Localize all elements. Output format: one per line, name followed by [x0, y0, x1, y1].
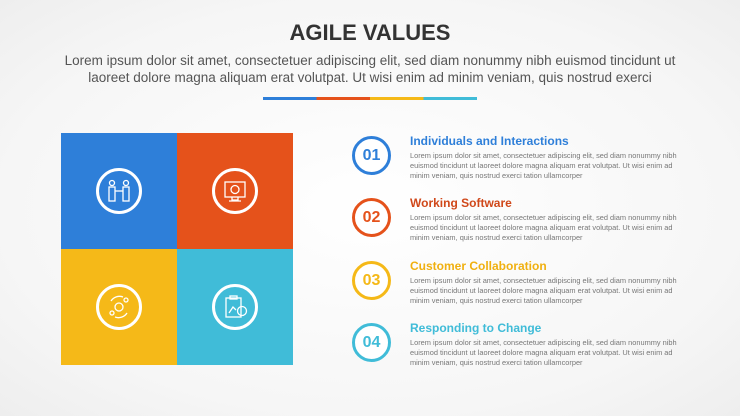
title: AGILE VALUES [290, 20, 450, 45]
heading 04: Responding to Change [410, 321, 541, 335]
number 01: 01 [363, 147, 380, 164]
number 02: 02 [363, 209, 380, 226]
number 02 [352, 198, 391, 237]
item 04 [352, 321, 677, 367]
number 04 [352, 323, 391, 362]
number 03: 03 [363, 272, 380, 289]
number 03 [352, 261, 391, 300]
number 01 [352, 136, 391, 175]
quadrant: orange monitor [177, 133, 293, 249]
quadrant: blue people [61, 133, 177, 249]
heading 02: Working Software [410, 196, 512, 210]
color underline [263, 97, 477, 100]
item 02 [352, 196, 677, 242]
text 03: Lorem ipsum dolor sit amet, consectetuer adipiscing elit, sed diam nonummy nibh euismod tincidunt ut laoreet dolore magna aliquam erat volutpat. Ut wisi enim ad minim veniam, quis nostrud exerci tation ullamcorper [410, 276, 677, 305]
text 01: Lorem ipsum dolor sit amet, consectetuer adipiscing elit, sed diam nonummy nibh euismod tincidunt ut laoreet dolore magna aliquam erat volutpat. Ut wisi enim ad minim veniam, quis nostrud exerci tation ullamcorper [410, 151, 677, 180]
text 04: Lorem ipsum dolor sit amet, consectetuer adipiscing elit, sed diam nonummy nibh euismod tincidunt ut laoreet dolore magna aliquam erat volutpat. Ut wisi enim ad minim veniam, quis nostrud exerci tation ullamcorper [410, 338, 677, 367]
heading 01: Individuals and Interactions [410, 134, 569, 148]
quadrant: cyan clipboard [177, 249, 293, 365]
item 03 [352, 259, 677, 305]
quadrant grid [61, 133, 293, 365]
number 04: 04 [363, 334, 380, 351]
text 02: Lorem ipsum dolor sit amet, consectetuer adipiscing elit, sed diam nonummy nibh euismod tincidunt ut laoreet dolore magna aliquam erat volutpat. Ut wisi enim ad minim veniam, quis nostrud exerci tation ullamcorper [410, 213, 677, 242]
heading 03: Customer Collaboration [410, 259, 547, 273]
quadrant: yellow collaboration [61, 249, 177, 365]
subtitle: Lorem ipsum dolor sit amet, consectetuer adipiscing elit, sed diam nonummy nibh euismod tincidunt ut laoreet dolore magna aliquam erat volutpat. Ut wisi enim ad minim veniam, quis nostrud exerci [65, 53, 675, 84]
item 01 [352, 134, 677, 180]
